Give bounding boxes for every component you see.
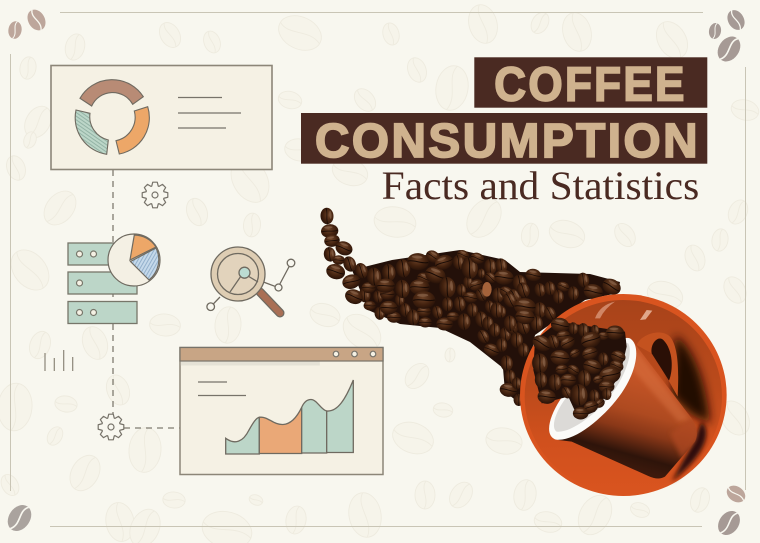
icon: small gear — [142, 182, 168, 208]
cup interior — [554, 343, 630, 432]
area chart — [226, 380, 353, 454]
connector end node — [202, 425, 208, 431]
icon: small bars — [45, 350, 73, 371]
donut segment: hatched green — [75, 110, 108, 154]
panel: browser window area chart — [180, 348, 383, 474]
window text lines — [198, 382, 246, 396]
panel: donut chart card — [51, 66, 272, 170]
donut segment: brown — [80, 80, 143, 106]
title: CONSUMPTION: CONSUMPTION — [315, 115, 700, 168]
window title bar — [180, 348, 383, 361]
corner coffee beans: top right — [708, 7, 748, 66]
corner coffee beans: top left — [7, 6, 49, 40]
coffee bean stream: tail and body — [320, 207, 624, 406]
corner coffee beans: bottom right — [714, 482, 748, 539]
icon: gear on connector — [98, 414, 124, 440]
text placeholder lines — [178, 98, 241, 128]
icon: server stack with pie chart — [68, 234, 160, 324]
pie chart — [108, 234, 160, 286]
saucer — [520, 294, 727, 496]
dashed connector: horizontal — [124, 427, 201, 429]
title: COFFEE: COFFEE — [494, 58, 687, 112]
handle opening — [651, 339, 672, 381]
donut segment: orange — [116, 107, 149, 154]
cup rim — [549, 338, 636, 440]
coffee cup — [549, 333, 697, 478]
cup body — [558, 340, 697, 478]
coffee beans spilling from cup — [530, 316, 627, 419]
subtitle: Facts and Statistics — [382, 163, 699, 208]
dashed connector: vertical — [112, 170, 114, 420]
icon: magnifier with network nodes — [207, 247, 295, 313]
cup handle — [637, 333, 678, 397]
corner coffee bean: bottom left — [3, 501, 36, 535]
